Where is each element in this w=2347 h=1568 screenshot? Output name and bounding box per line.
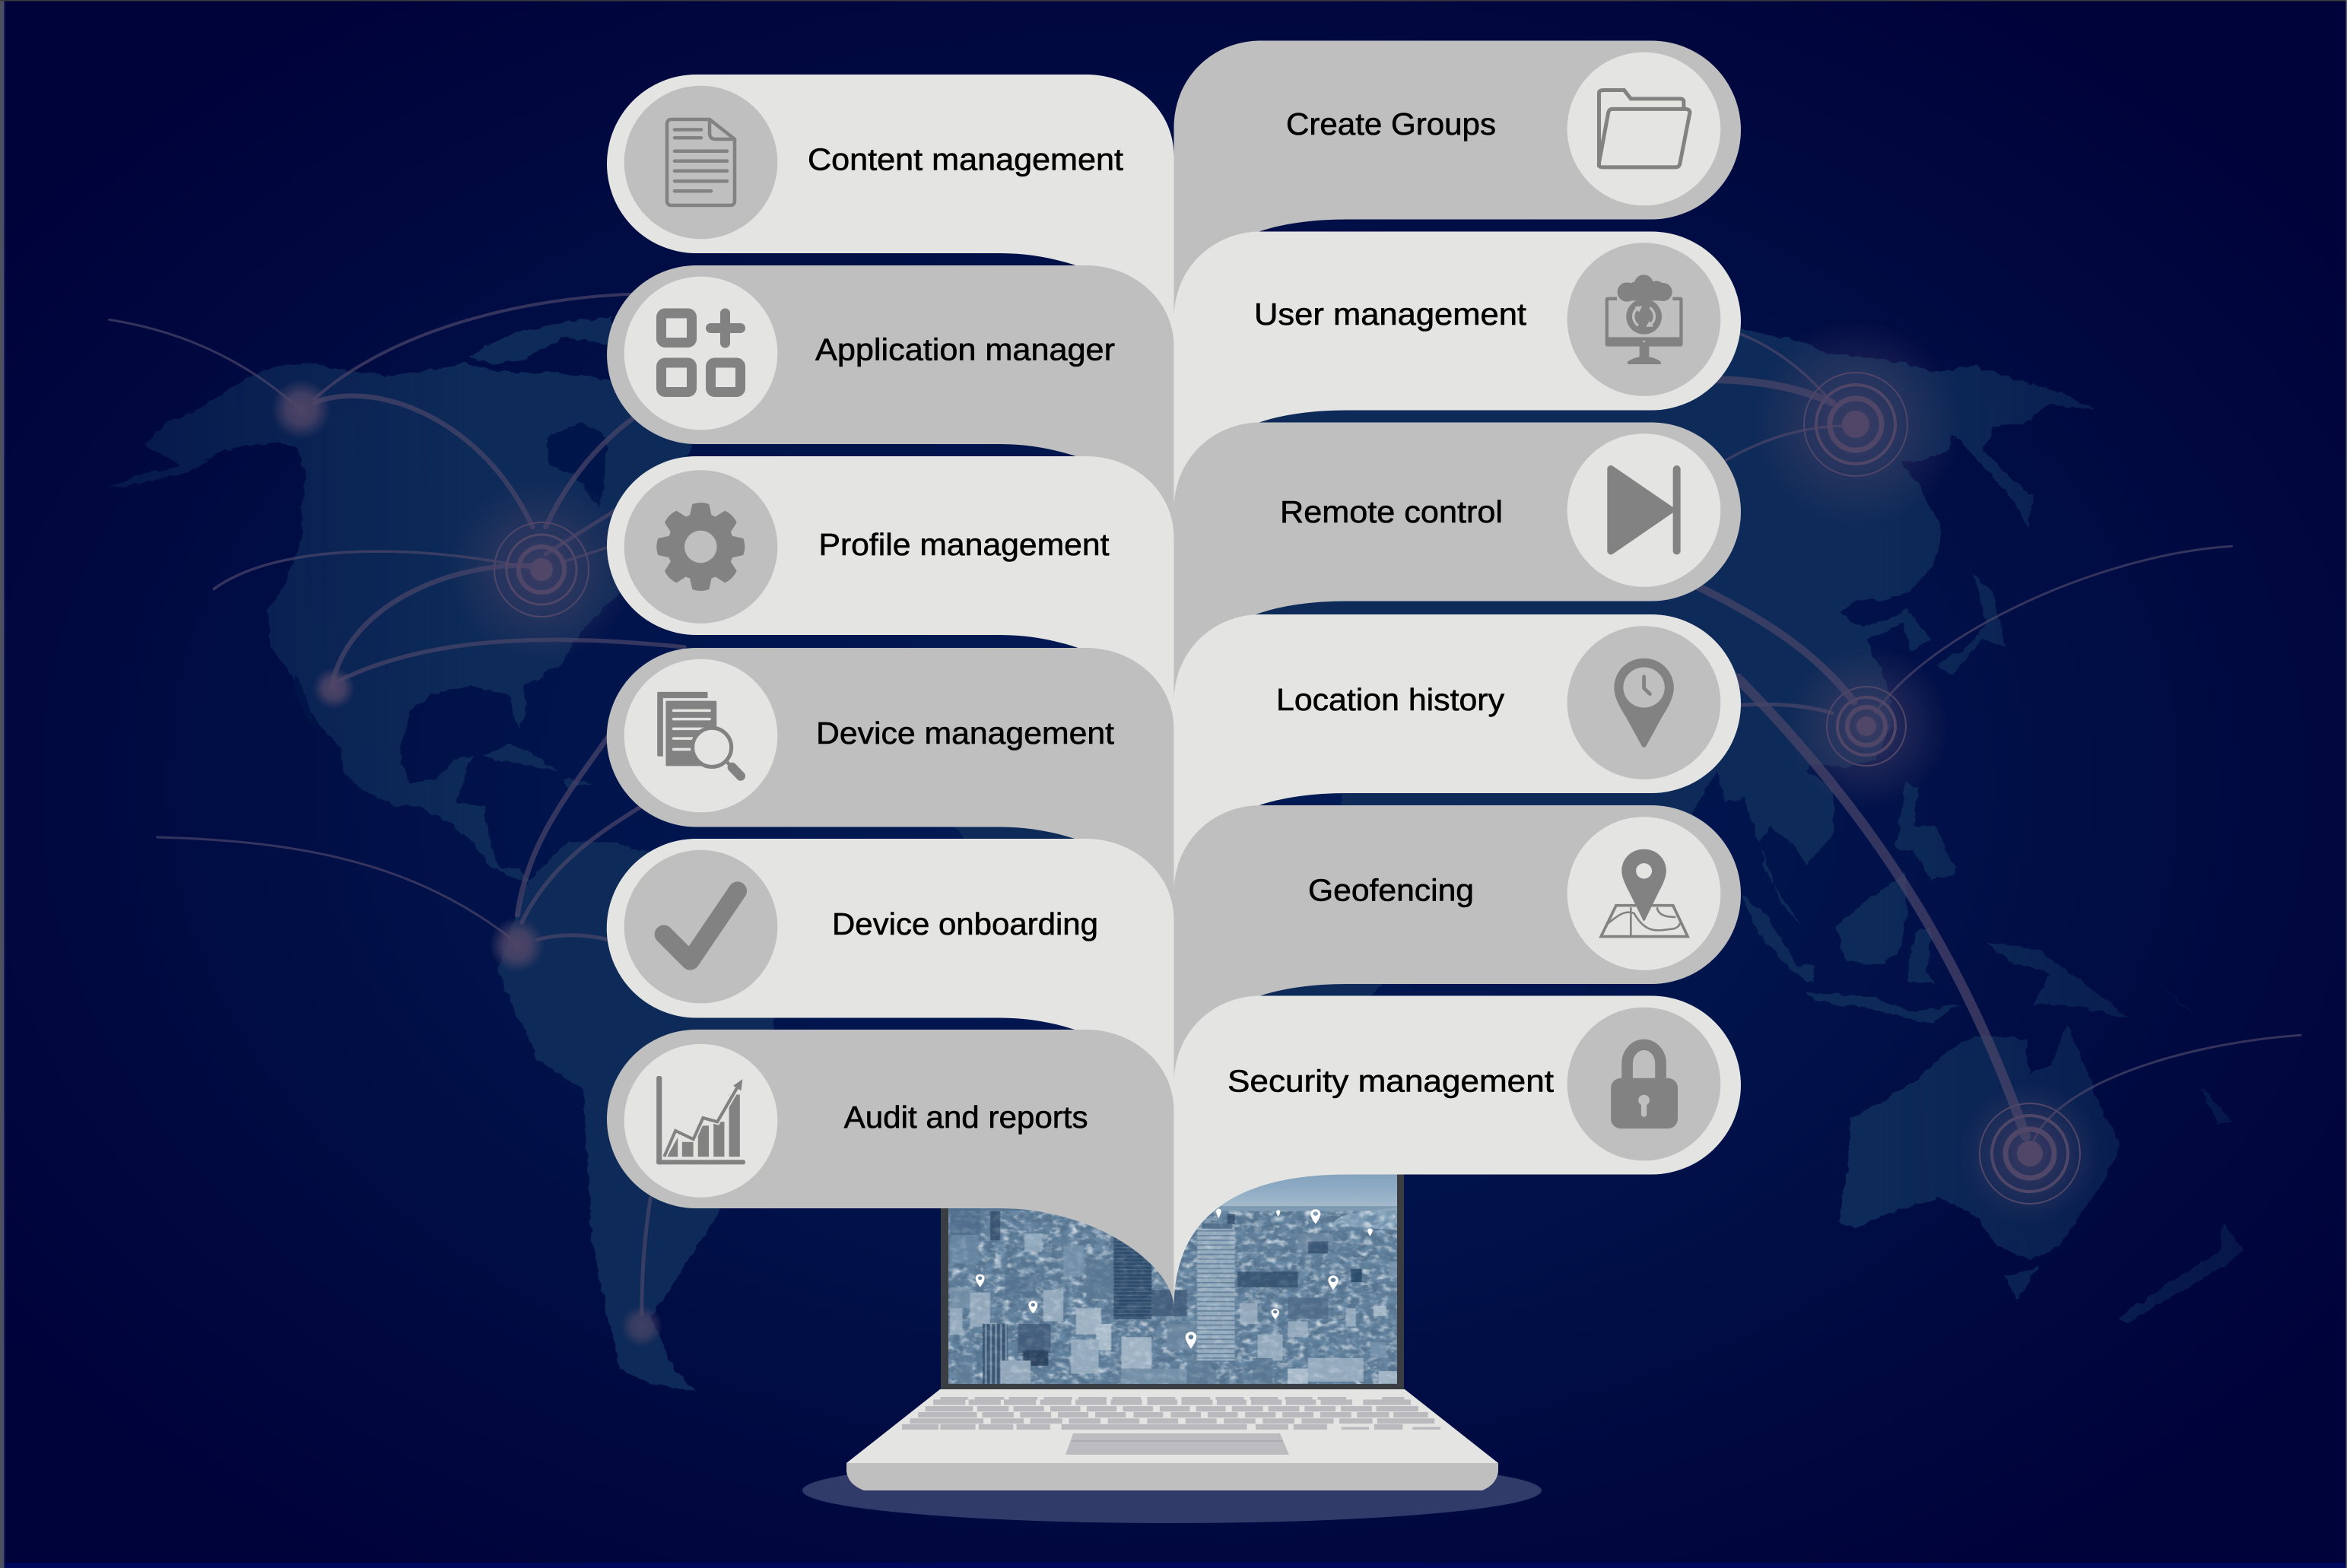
location pins bbox=[976, 1209, 1373, 1349]
land: Africa bbox=[951, 669, 1164, 973]
icon disc bbox=[624, 277, 777, 430]
label: Location history bbox=[1276, 682, 1505, 717]
icon disc bbox=[1567, 243, 1720, 396]
label: Create Groups bbox=[1286, 106, 1496, 141]
icon: check mark bbox=[664, 891, 738, 960]
icon: folder bbox=[1599, 90, 1690, 167]
land: Asia and Oceania bbox=[1459, 329, 2244, 1322]
label: Security management bbox=[1227, 1064, 1555, 1099]
laptop keyboard deck bbox=[846, 1389, 1498, 1463]
label: Device management bbox=[816, 716, 1115, 751]
icon: clock pin bbox=[1614, 659, 1674, 747]
label: Application manager bbox=[815, 332, 1115, 367]
icon disc bbox=[624, 850, 777, 1003]
land: central Eurasia behind the pills bbox=[1186, 335, 1742, 1004]
panel: Audit and reports bbox=[607, 1030, 1174, 1308]
label: Audit and reports bbox=[844, 1100, 1088, 1135]
label: Geofencing bbox=[1308, 873, 1474, 908]
laptop shadow bbox=[802, 1458, 1542, 1523]
left column of feature pills bbox=[607, 75, 1174, 1308]
laptop bbox=[846, 1163, 1498, 1490]
icon disc bbox=[1567, 1008, 1720, 1160]
icon disc bbox=[1567, 52, 1720, 205]
panel: Remote control bbox=[1174, 423, 1741, 735]
icon disc bbox=[1567, 817, 1720, 970]
panel: Device onboarding bbox=[607, 839, 1174, 1117]
network nodes bbox=[271, 318, 2102, 1347]
laptop front edge bbox=[846, 1463, 1498, 1490]
panel: Location history bbox=[1174, 614, 1741, 926]
panel: Profile management bbox=[607, 456, 1174, 735]
icon: document bbox=[667, 119, 735, 205]
icon: skip forward bbox=[1611, 465, 1681, 554]
network arcs: Asia Pacific bbox=[1694, 333, 2301, 1140]
city photo on screen bbox=[948, 1166, 1397, 1384]
label: Remote control bbox=[1280, 494, 1503, 529]
right column of feature pills bbox=[1174, 41, 1741, 1308]
icon disc bbox=[624, 470, 777, 624]
label: Content management bbox=[808, 142, 1124, 177]
icon disc bbox=[624, 1044, 777, 1197]
icon disc bbox=[624, 86, 777, 239]
icon: monitor with cloud sync bbox=[1605, 275, 1683, 364]
icon disc bbox=[1567, 433, 1720, 587]
label: User management bbox=[1254, 297, 1527, 332]
panel: Application manager bbox=[607, 265, 1174, 544]
panel: Content management bbox=[607, 75, 1174, 353]
label: Profile management bbox=[818, 527, 1110, 562]
panel: Geofencing bbox=[1174, 805, 1741, 1117]
panel: Create Groups bbox=[1174, 41, 1741, 353]
icon: app grid bbox=[662, 313, 741, 392]
label: Device onboarding bbox=[832, 906, 1098, 941]
network arcs: Americas bbox=[110, 294, 684, 1315]
laptop keys bbox=[903, 1398, 1440, 1430]
panel: Device management bbox=[607, 648, 1174, 926]
city buildings bbox=[950, 1208, 1397, 1384]
icon disc bbox=[624, 659, 777, 812]
laptop screen bezel bbox=[941, 1163, 1404, 1390]
panel: User management bbox=[1174, 231, 1741, 544]
icon: map pin on map bbox=[1601, 849, 1688, 937]
world map bbox=[107, 317, 2244, 1392]
icon: growth chart bbox=[656, 1076, 745, 1164]
icon: padlock bbox=[1611, 1045, 1678, 1128]
panel: Security management bbox=[1174, 995, 1741, 1308]
icon disc bbox=[1567, 626, 1720, 779]
land: Americas bbox=[107, 317, 786, 1392]
icon: documents with magnifier bbox=[657, 692, 741, 776]
icon: gear bbox=[656, 503, 745, 591]
laptop trackpad bbox=[1066, 1433, 1289, 1455]
